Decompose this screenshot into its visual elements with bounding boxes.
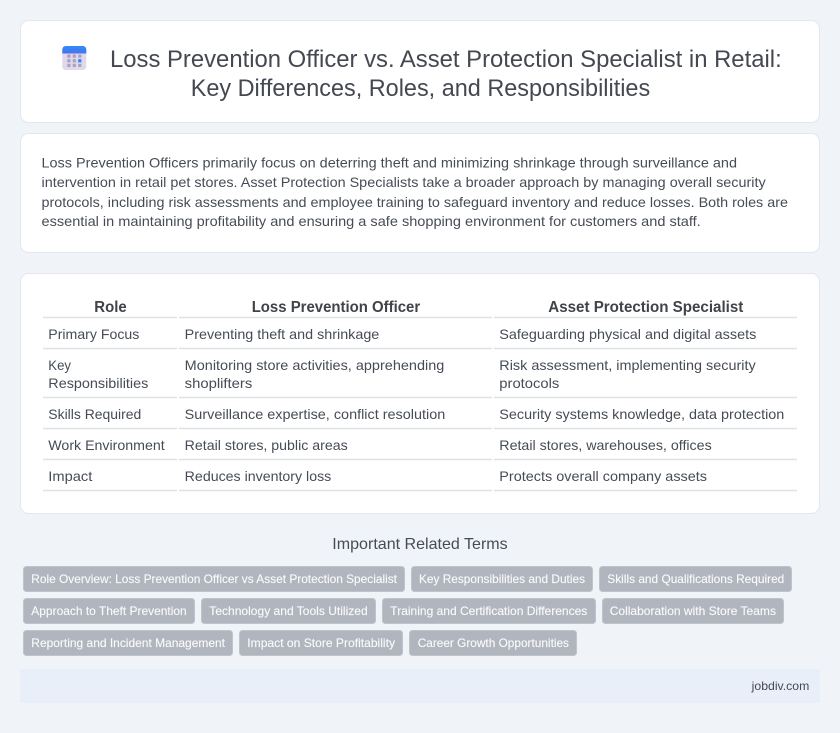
footer source text: jobdiv.com — [751, 679, 809, 693]
table row: work environment: Retail stores, warehouses, offices — [499, 437, 712, 453]
tag: profitability: Impact on Store Profitability — [247, 636, 395, 650]
table row: key responsibilities: protocols — [499, 375, 559, 391]
table row: work environment — [43, 437, 797, 460]
table row: key responsibilities — [43, 357, 797, 398]
table row: primary focus: Preventing theft and shrinkage — [185, 326, 380, 342]
related term tags — [24, 566, 792, 656]
tag: training: Training and Certification Differences — [390, 604, 587, 618]
tag: theft prevention: Approach to Theft Prevention — [31, 604, 187, 618]
table row: primary focus — [43, 326, 797, 348]
tag: role overview — [24, 566, 404, 592]
table header row — [43, 299, 797, 318]
table row: key responsibilities: Key — [48, 357, 71, 373]
tag: reporting: Reporting and Incident Management — [31, 636, 226, 650]
tag: career growth: Career Growth Opportunities — [418, 636, 569, 650]
table row: key responsibilities: Monitoring store activities, apprehending — [185, 357, 444, 373]
table row: work environment: Retail stores, public areas — [185, 437, 348, 453]
table row: skills required: Security systems knowledge, data protection — [499, 406, 784, 422]
text block: introduction paragraph: protocols, including risk assessments and employee training to safeguard inventory and reduce losses. Both roles are — [42, 194, 788, 210]
table row: skills required: Skills Required — [48, 406, 141, 422]
title — [110, 46, 782, 102]
tag: skills — [600, 566, 792, 592]
table row: key responsibilities: Responsibilities — [48, 375, 148, 391]
table row: impact: Impact — [48, 468, 92, 484]
title: Key Differences, Roles, and Responsibilities — [191, 75, 650, 102]
tag: technology — [202, 598, 376, 624]
table header row: Loss Prevention Officer — [252, 299, 420, 316]
tag: collaboration — [602, 598, 784, 624]
text block: introduction paragraph: Loss Prevention Officers primarily focus on deterring theft and minimizing shrinkage through surveillance and — [42, 154, 737, 170]
table header row: Asset Protection Specialist — [548, 299, 744, 316]
tag: reporting — [24, 630, 232, 656]
table row: skills required: Surveillance expertise, conflict resolution — [185, 406, 445, 422]
tag: skills: Skills and Qualifications Required — [607, 572, 784, 586]
table row: impact — [43, 468, 797, 490]
table row: skills required — [43, 406, 797, 428]
panel: title header — [20, 20, 820, 122]
tag: key responsibilities — [412, 566, 592, 592]
tag: collaboration: Collaboration with Store Teams — [610, 604, 776, 618]
heading: important related terms: Important Related Terms — [332, 536, 508, 553]
title: Loss Prevention Officer vs. Asset Protection Specialist in Retail: — [110, 46, 782, 73]
panel: introduction — [20, 134, 820, 252]
table row: primary focus: Safeguarding physical and digital assets — [499, 326, 756, 342]
table row: primary focus: Primary Focus — [48, 326, 139, 342]
icon: calendar — [62, 46, 86, 70]
table row: key responsibilities: Risk assessment, implementing security — [499, 357, 756, 373]
tag: role overview: Role Overview: Loss Prevention Officer vs Asset Protection Specialist — [31, 572, 398, 586]
table row: key responsibilities: shoplifters — [185, 375, 252, 391]
text block: introduction paragraph: intervention in retail pet stores. Asset Protection Specialists take a broader approach by managing overall security — [42, 174, 766, 190]
tag: theft prevention — [24, 598, 194, 624]
table header row: Role — [94, 299, 127, 316]
tag: career growth — [410, 630, 576, 656]
table row: impact: Protects overall company assets — [499, 468, 707, 484]
tag: training — [382, 598, 596, 624]
text block: introduction paragraph: essential in maintaining profitability and ensuring a safe shopping environment for customers and staff. — [42, 213, 701, 229]
panel: comparison table — [20, 274, 820, 514]
table row: work environment: Work Environment — [48, 437, 165, 453]
text block: introduction paragraph — [42, 154, 788, 229]
tag: technology: Technology and Tools Utilized — [209, 604, 368, 618]
footer bar — [20, 669, 820, 703]
table row: impact: Reduces inventory loss — [185, 468, 331, 484]
tag: profitability — [240, 630, 402, 656]
tag: key responsibilities: Key Responsibilities and Duties — [419, 572, 585, 586]
